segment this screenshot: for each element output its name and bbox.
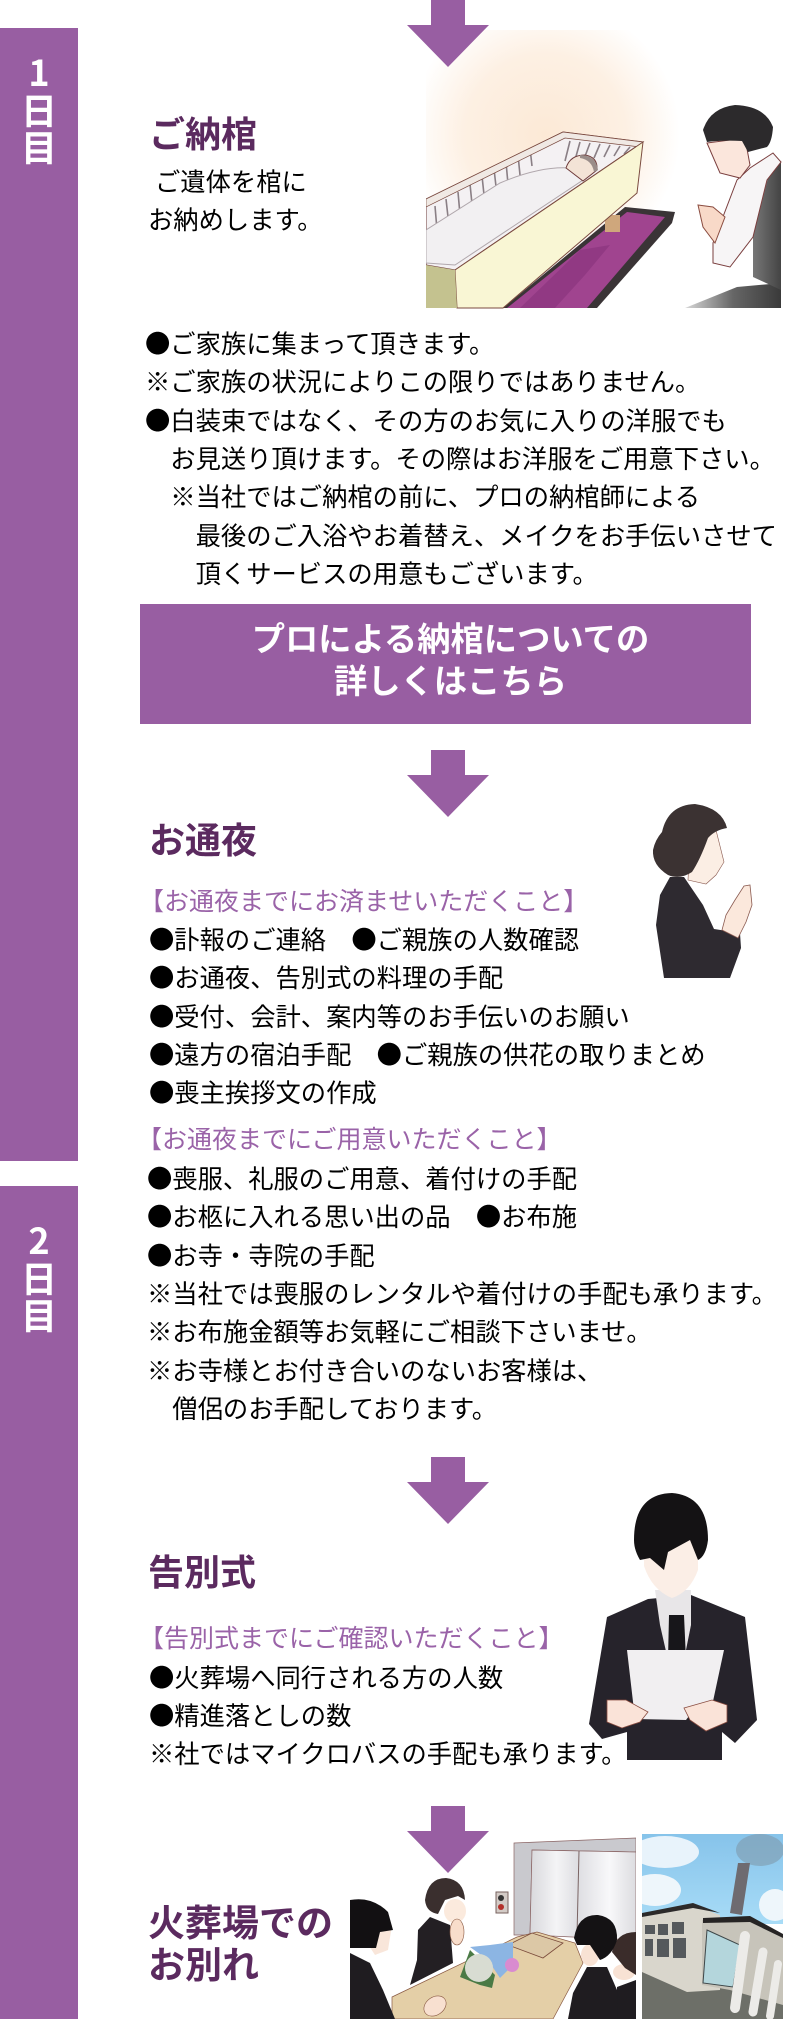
sheet [426, 168, 583, 265]
coffin foot [605, 215, 620, 232]
illustration: coffin and praying man [426, 30, 782, 308]
arrow 4 [407, 1806, 489, 1873]
text list: ご納棺 notes: お見送り頂けます。その際はお洋服をご用意下さい。 [170, 440, 775, 476]
head [566, 155, 597, 181]
sidebar band: day 1 [0, 28, 78, 1161]
heading: お通夜: お通夜 [149, 820, 257, 861]
text list: お済ませいただくこと: ●受付、会計、案内等のお手伝いのお願い [149, 998, 630, 1034]
praying hand [420, 1992, 450, 2019]
entrance wing [702, 1918, 783, 2005]
sidebar label: day 2 [21, 1213, 57, 1340]
paper [627, 1650, 724, 1720]
text list: ご用意いただくこと [147, 1160, 777, 1426]
carpet tray [503, 207, 675, 308]
coffin end [426, 265, 457, 308]
sky [642, 1834, 783, 1924]
coffin [392, 1932, 583, 2019]
coffin window [508, 1933, 563, 1958]
illustration: praying woman [653, 804, 752, 978]
heading: 火葬場でのお別れ: 火葬場での [148, 1903, 333, 1944]
sidebar label: day 2: 日 [21, 1250, 57, 1302]
text list: お済ませいただくこと: ●遠方の宿泊手配 ●ご親族の供花の取りまとめ [149, 1036, 706, 1072]
button: プロによる納棺: 詳しくはこちら [334, 664, 567, 701]
neck and face [688, 830, 724, 884]
subheading: ご用意いただくこと: 【お通夜までにご用意いただくこと】 [137, 1126, 562, 1154]
carpet [507, 212, 665, 308]
button panel [496, 1892, 508, 1913]
text list: ご用意いただくこと: ●お寺・寺院の手配 [147, 1237, 375, 1273]
sidebar label: day 1: 1 [28, 45, 50, 97]
text list: ご用意いただくこと: ●喪服、礼服のご用意、着付けの手配 [147, 1160, 577, 1196]
text list: お済ませいただくこと: ●訃報のご連絡 ●ご親族の人数確認 [149, 921, 579, 957]
sidebar label: day 1: 目 [21, 120, 57, 172]
kneeling man [685, 283, 781, 308]
button: プロによる納棺 [140, 604, 751, 724]
subheading: お済ませいただくこと: 【お通夜までにお済ませいただくこと】 [139, 888, 588, 916]
door seam [577, 1851, 579, 1936]
text list: ご納棺 notes: ●白装束ではなく、その方のお気に入りの洋服でも [145, 402, 727, 438]
arrow 1 [407, 0, 489, 67]
hands [722, 885, 752, 938]
illustration: farewell scene at the crematorium [350, 1838, 636, 2019]
text list: ご用意いただくこと: ※お寺様とお付き合いのないお客様は、 [147, 1352, 602, 1388]
heading: ご納棺: ご納棺 [149, 114, 257, 155]
sidebar band: day 2 [0, 1186, 78, 2019]
body [656, 877, 741, 978]
right men [617, 1980, 636, 2019]
coffin rim [426, 132, 643, 207]
text list: ご納棺 notes: 頂くサービスの用意もございます。 [196, 555, 598, 591]
text list: ご用意いただくこと: ※当社では喪服のレンタルや着付けの手配も承ります。 [147, 1275, 777, 1311]
description: ご納棺: ご遺体を棺に [155, 163, 307, 199]
text list: ご確認いただくこと: ※社ではマイクロバスの手配も承ります。 [149, 1735, 627, 1771]
chimney [730, 1863, 750, 1915]
tie [668, 1615, 686, 1660]
coffin side [455, 142, 643, 308]
text list: ご用意いただくこと: ※お布施金額等お気軽にご相談下さいませ。 [147, 1313, 652, 1349]
columns [735, 1936, 778, 2016]
sidebar label: day 2: 2 [28, 1213, 50, 1265]
text list: お済ませいただくこと: ●喪主挨拶文の作成 [149, 1074, 377, 1110]
bouquet [470, 1942, 513, 1978]
text list: ご用意いただくこと: 僧侶のお手配しております。 [172, 1390, 497, 1426]
background glow [426, 30, 696, 270]
text list: ご納棺 notes: 最後のご入浴やお着替え、メイクをお手伝いさせて [196, 517, 777, 553]
left man [350, 1953, 395, 2019]
text list: ご納棺 notes: ※ご家族の状況によりこの限りではありません。 [145, 363, 700, 399]
wall of furnace doors [514, 1838, 636, 1935]
subheading: ご確認いただくこと: 【告別式までにご確認いただくこと】 [139, 1625, 564, 1653]
coffin interior [426, 132, 643, 270]
text list: ご納棺 notes [145, 325, 777, 591]
text list: お済ませいただくこと: ●お通夜、告別式の料理の手配 [149, 959, 503, 995]
face [644, 1540, 698, 1598]
left wing [642, 1905, 720, 1992]
heading: 火葬場でのお別れ [148, 1903, 333, 1986]
hair [634, 1493, 708, 1570]
description: ご納棺: お納めします。 [148, 201, 323, 237]
sidebar label: day 1 [21, 45, 57, 172]
arrow 2 [407, 750, 489, 817]
text list: ご納棺 notes: ●ご家族に集まって頂きます。 [145, 325, 494, 361]
heading: 火葬場でのお別れ: お別れ [148, 1945, 259, 1986]
illustration: man reading a speech [589, 1493, 757, 1760]
arrow 3 [407, 1457, 489, 1524]
heading: 告別式: 告別式 [148, 1552, 256, 1593]
text list: ご確認いただくこと: ●精進落としの数 [149, 1697, 351, 1733]
text list: ご用意いただくこと: ●お柩に入れる思い出の品 ●お布施 [147, 1198, 577, 1234]
hair [653, 804, 727, 877]
shirt [655, 1590, 691, 1660]
glass doors [703, 1930, 740, 1987]
illustration: crematorium building under a blue sky [642, 1834, 783, 2019]
hands [607, 1700, 648, 1728]
woman [410, 1917, 453, 1985]
jacket [589, 1595, 757, 1760]
text list: ご納棺 notes: ※当社ではご納棺の前に、プロの納棺師による [170, 478, 700, 514]
windows [645, 1922, 686, 1958]
description: ご納棺 [148, 163, 323, 237]
button: プロによる納棺: プロによる納棺についての [252, 622, 649, 659]
text list: ご確認いただくこと [149, 1659, 627, 1771]
ground [642, 1965, 783, 2019]
text list: お済ませいただくこと [149, 921, 706, 1110]
text list: ご確認いただくこと: ●火葬場へ同行される方の人数 [149, 1659, 503, 1695]
sidebar label: day 1: 日 [21, 82, 57, 134]
sidebar label: day 2: 目 [21, 1288, 57, 1340]
